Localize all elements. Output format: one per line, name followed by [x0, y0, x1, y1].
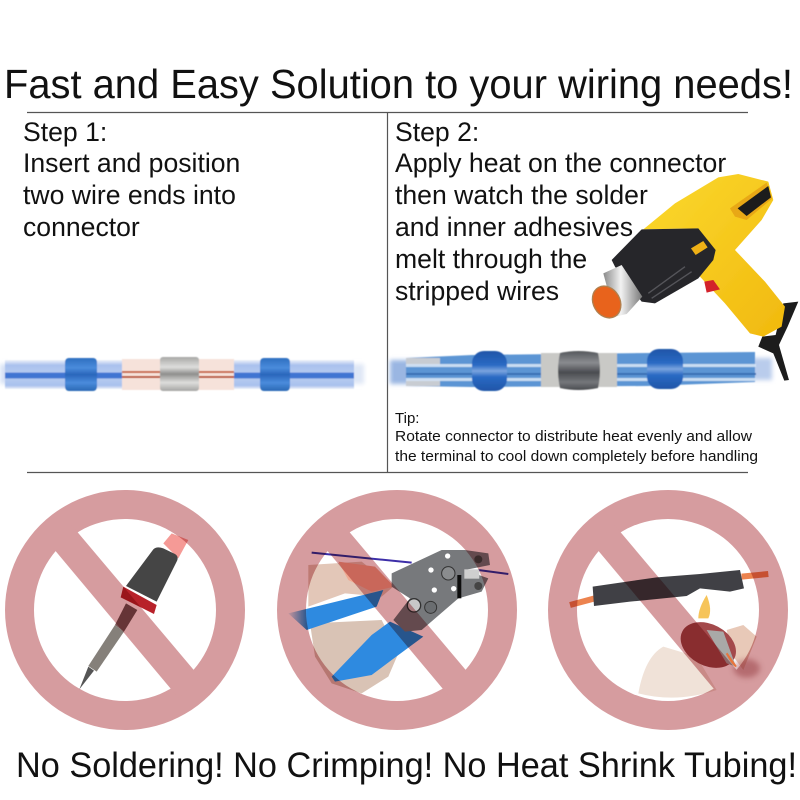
hand	[308, 562, 393, 607]
flame	[698, 595, 710, 618]
step 2 melted connector photo	[390, 349, 772, 391]
prohibition sign	[548, 490, 788, 730]
no soldering iron icon	[5, 490, 245, 730]
fingers	[638, 647, 717, 698]
black nozzle housing	[612, 228, 716, 303]
step 2 text: Step 2:	[395, 117, 479, 147]
wire tail right	[750, 358, 772, 380]
step 1 text: Step 1:	[23, 117, 107, 147]
crimping pliers and hand	[288, 550, 508, 693]
soldering iron	[79, 533, 188, 689]
tip text: Tip:	[395, 410, 419, 427]
shrunken sleeve	[406, 352, 755, 387]
steel jaws	[392, 550, 490, 632]
glowing element	[587, 281, 627, 323]
air vent	[730, 183, 772, 220]
tip text	[395, 410, 758, 465]
heat shrink tube	[593, 570, 744, 606]
yellow body and handle	[643, 174, 785, 337]
step 1 text	[23, 117, 240, 242]
blue ring right	[647, 349, 683, 389]
switch	[691, 241, 708, 255]
step 1 text: connector	[23, 212, 140, 242]
orange wire	[570, 574, 768, 605]
step 2 text: and inner adhesives	[395, 212, 633, 242]
power cord	[758, 302, 798, 381]
lighter	[673, 613, 744, 677]
no heat shrink tubing icon	[548, 490, 788, 730]
blue sealing ring left	[65, 358, 97, 391]
step 1 text: Insert and position	[23, 148, 240, 178]
step 2 text	[395, 117, 726, 306]
tip text: Rotate connector to distribute heat evenly and allow	[395, 428, 752, 445]
blue ring left	[472, 351, 507, 391]
trigger	[704, 280, 720, 293]
blue lower handle	[332, 622, 423, 682]
prohibition sign	[5, 490, 245, 730]
step 2 text: Apply heat on the connector	[395, 148, 726, 178]
step 2 text: melt through the	[395, 244, 587, 274]
blue upper handle	[288, 590, 383, 630]
blue wire tail left	[390, 360, 420, 384]
no crimping tool icon	[277, 490, 517, 730]
step 1 text: two wire ends into	[23, 180, 236, 210]
wire	[312, 553, 508, 574]
tip text: the terminal to cool down completely before handling	[395, 448, 758, 465]
chrome nozzle	[603, 265, 642, 317]
clear band around solder	[541, 353, 617, 387]
title: Fast and Easy Solution to your wiring needs!	[4, 61, 793, 107]
step 1 connector photo	[0, 357, 364, 391]
tubing and lighter	[570, 570, 768, 698]
solder blob	[558, 351, 600, 390]
solder ring	[160, 357, 199, 391]
heat gun	[587, 174, 798, 381]
blue sealing ring right	[260, 358, 290, 391]
insulated wire ends	[0, 360, 364, 389]
clear sleeve with copper strands	[122, 359, 234, 390]
prohibition sign	[277, 490, 517, 730]
wrist shadow	[733, 659, 760, 678]
step 2 text: then watch the solder	[395, 180, 648, 210]
divider frame	[27, 112, 748, 472]
bottom caption: No Soldering! No Crimping! No Heat Shrink Tubing!	[16, 746, 797, 785]
step 2 text: stripped wires	[395, 276, 559, 306]
